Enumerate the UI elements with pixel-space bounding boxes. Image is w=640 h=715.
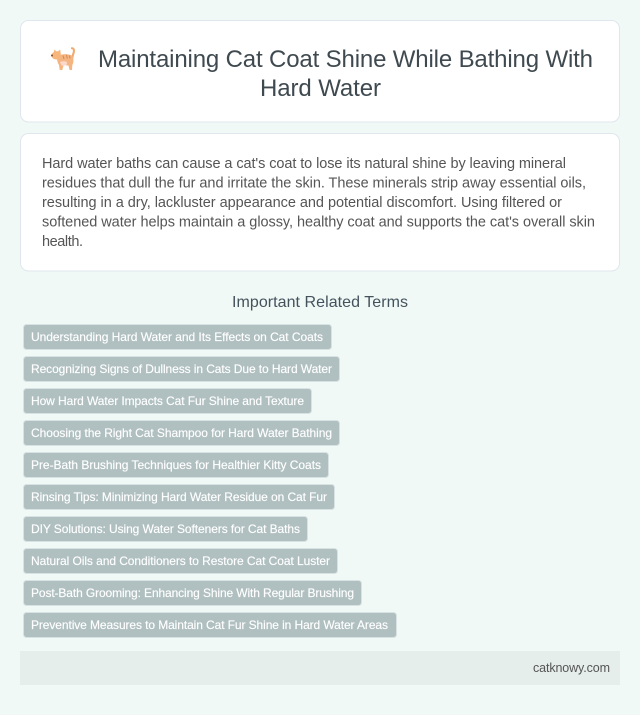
term 10: [24, 612, 396, 638]
term 10: Preventive Measures to Maintain Cat Fur Shine in Hard Water Areas: [31, 618, 388, 632]
term 1: Understanding Hard Water and Its Effects on Cat Coats: [31, 330, 323, 344]
title text: Hard Water: [260, 75, 381, 102]
term 6: Rinsing Tips: Minimizing Hard Water Residue on Cat Fur: [31, 490, 327, 504]
footer: catknowy.com: [533, 661, 610, 675]
term 8: [24, 548, 338, 574]
term 5: Pre-Bath Brushing Techniques for Healthier Kitty Coats: [31, 458, 321, 472]
term 4: Choosing the Right Cat Shampoo for Hard Water Bathing: [31, 426, 332, 440]
summary text: Hard water baths can cause a cat's coat to lose its natural shine by leaving mineral: [42, 156, 566, 172]
term 7: DIY Solutions: Using Water Softeners for Cat Baths: [31, 522, 300, 536]
term 7: [24, 516, 308, 542]
term 8: Natural Oils and Conditioners to Restore Cat Coat Luster: [31, 554, 330, 568]
term 6: [24, 484, 334, 510]
term 3: How Hard Water Impacts Cat Fur Shine and Texture: [31, 394, 304, 408]
summary text: softened water helps maintain a glossy, healthy coat and supports the cat's overall skin: [42, 214, 595, 230]
footer: [20, 651, 620, 685]
term 3: [24, 388, 312, 414]
term 2: Recognizing Signs of Dullness in Cats Due to Hard Water: [31, 362, 332, 376]
term 2: [24, 356, 340, 382]
summary text: [42, 156, 595, 250]
panel: title card: [20, 20, 620, 122]
icon: cat: [51, 47, 75, 70]
heading: important related terms: Important Related Terms: [232, 294, 408, 311]
term 1: [24, 324, 332, 350]
title text: [98, 46, 593, 102]
panel: summary: [20, 134, 620, 271]
term 4: [24, 420, 340, 446]
summary text: resulting in a dry, lackluster appearance and potential discomfort. Using filtered or: [42, 195, 562, 211]
summary text: health.: [42, 234, 83, 250]
term 9: [24, 580, 362, 606]
summary text: residues that dull the fur and irritate the skin. These minerals strip away essential oils,: [42, 176, 586, 192]
title text: Maintaining Cat Coat Shine While Bathing With: [98, 46, 593, 73]
term 9: Post-Bath Grooming: Enhancing Shine With Regular Brushing: [31, 586, 354, 600]
term 5: [24, 452, 328, 478]
term list: [24, 324, 396, 638]
